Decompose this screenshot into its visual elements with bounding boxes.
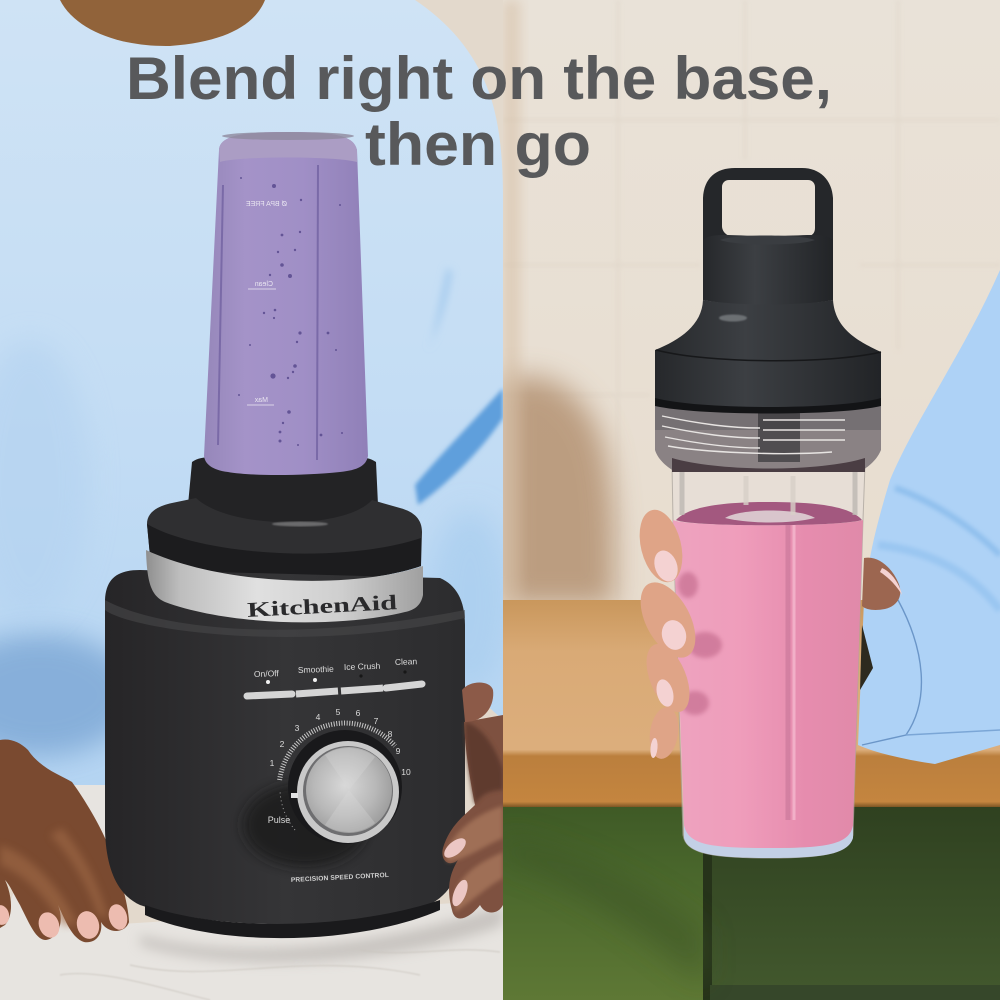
speed numbers: 9 <box>396 746 401 756</box>
thumb <box>862 558 900 610</box>
control labels: Smoothie <box>298 664 334 675</box>
speed numbers: 3 <box>295 723 300 733</box>
brand name: KitchenAid <box>247 590 398 622</box>
right sleeve <box>858 270 1000 764</box>
green cabinets <box>503 807 1000 1000</box>
control labels: Clean <box>395 656 418 667</box>
lid highlight <box>272 522 328 526</box>
title <box>126 45 832 178</box>
fingernails <box>444 838 468 906</box>
gap behind bottle <box>860 625 873 690</box>
marble veins <box>60 950 500 1000</box>
fingers <box>629 505 707 761</box>
speed numbers: 7 <box>374 716 379 726</box>
speed numbers: 2 <box>280 739 285 749</box>
blender cup <box>204 132 368 475</box>
glass top <box>219 132 357 162</box>
speed numbers: 5 <box>336 707 341 717</box>
thumb <box>462 682 493 722</box>
panel: right photo <box>503 0 1000 1000</box>
hand: left <box>0 739 130 942</box>
wood counter <box>503 600 1000 808</box>
icon: blender with blending cup <box>105 132 465 938</box>
neck <box>60 0 265 46</box>
bottle jar <box>672 465 865 858</box>
speed numbers: 6 <box>356 708 361 718</box>
wall shadow <box>503 376 615 605</box>
sleeve folds <box>895 488 1000 555</box>
speed numbers: 4 <box>316 712 321 722</box>
speckles <box>238 177 343 446</box>
tile lines <box>503 0 1000 600</box>
speed numbers <box>268 707 411 825</box>
cap <box>703 235 833 305</box>
title: Blend right on the base, <box>126 45 832 112</box>
shoulder <box>655 300 881 409</box>
blender collar <box>188 457 378 524</box>
counter shadow <box>140 905 503 962</box>
speed numbers: 1 <box>270 758 275 768</box>
control labels <box>254 656 418 679</box>
cup markings: Max <box>254 397 268 404</box>
speed scale <box>280 723 395 780</box>
dial shadow <box>243 783 367 867</box>
speed numbers: 10 <box>401 767 411 777</box>
title: then go <box>365 111 591 178</box>
control labels: On/Off <box>254 668 280 679</box>
hand: holding bottle <box>629 505 902 761</box>
silver band <box>146 550 423 622</box>
model caption: PRECISION SPEED CONTROL <box>291 872 389 884</box>
cup markings <box>246 201 287 404</box>
dial knob <box>288 730 402 844</box>
icon: travel bottle <box>655 168 881 858</box>
control buttons <box>247 684 422 696</box>
jar ribs <box>682 470 855 515</box>
cup markings: Clean <box>255 281 273 288</box>
sweater <box>0 0 503 790</box>
lit fingers <box>447 806 503 912</box>
body <box>105 570 465 924</box>
sweater fold shading <box>0 268 510 757</box>
speed numbers: 8 <box>388 729 393 739</box>
cuff stitching <box>862 600 921 745</box>
cup ribs <box>218 165 318 460</box>
finger shadows <box>678 572 722 715</box>
cup markings: Ø BPA FREE <box>246 201 287 208</box>
fingernails <box>650 547 902 758</box>
control indicator lights <box>266 670 407 684</box>
smoothie <box>673 520 863 848</box>
marble counter <box>0 785 503 1000</box>
cup rim <box>222 132 354 140</box>
speed numbers: Pulse <box>268 815 290 825</box>
thread ring <box>655 405 881 472</box>
fingernails <box>0 904 128 939</box>
palm shadow <box>465 722 503 805</box>
glass base <box>684 825 853 858</box>
panel: left photo <box>0 0 510 1000</box>
blender lid <box>147 498 422 582</box>
handle <box>703 168 833 245</box>
control labels: Ice Crush <box>344 661 381 672</box>
hand: right on blender <box>441 682 503 918</box>
